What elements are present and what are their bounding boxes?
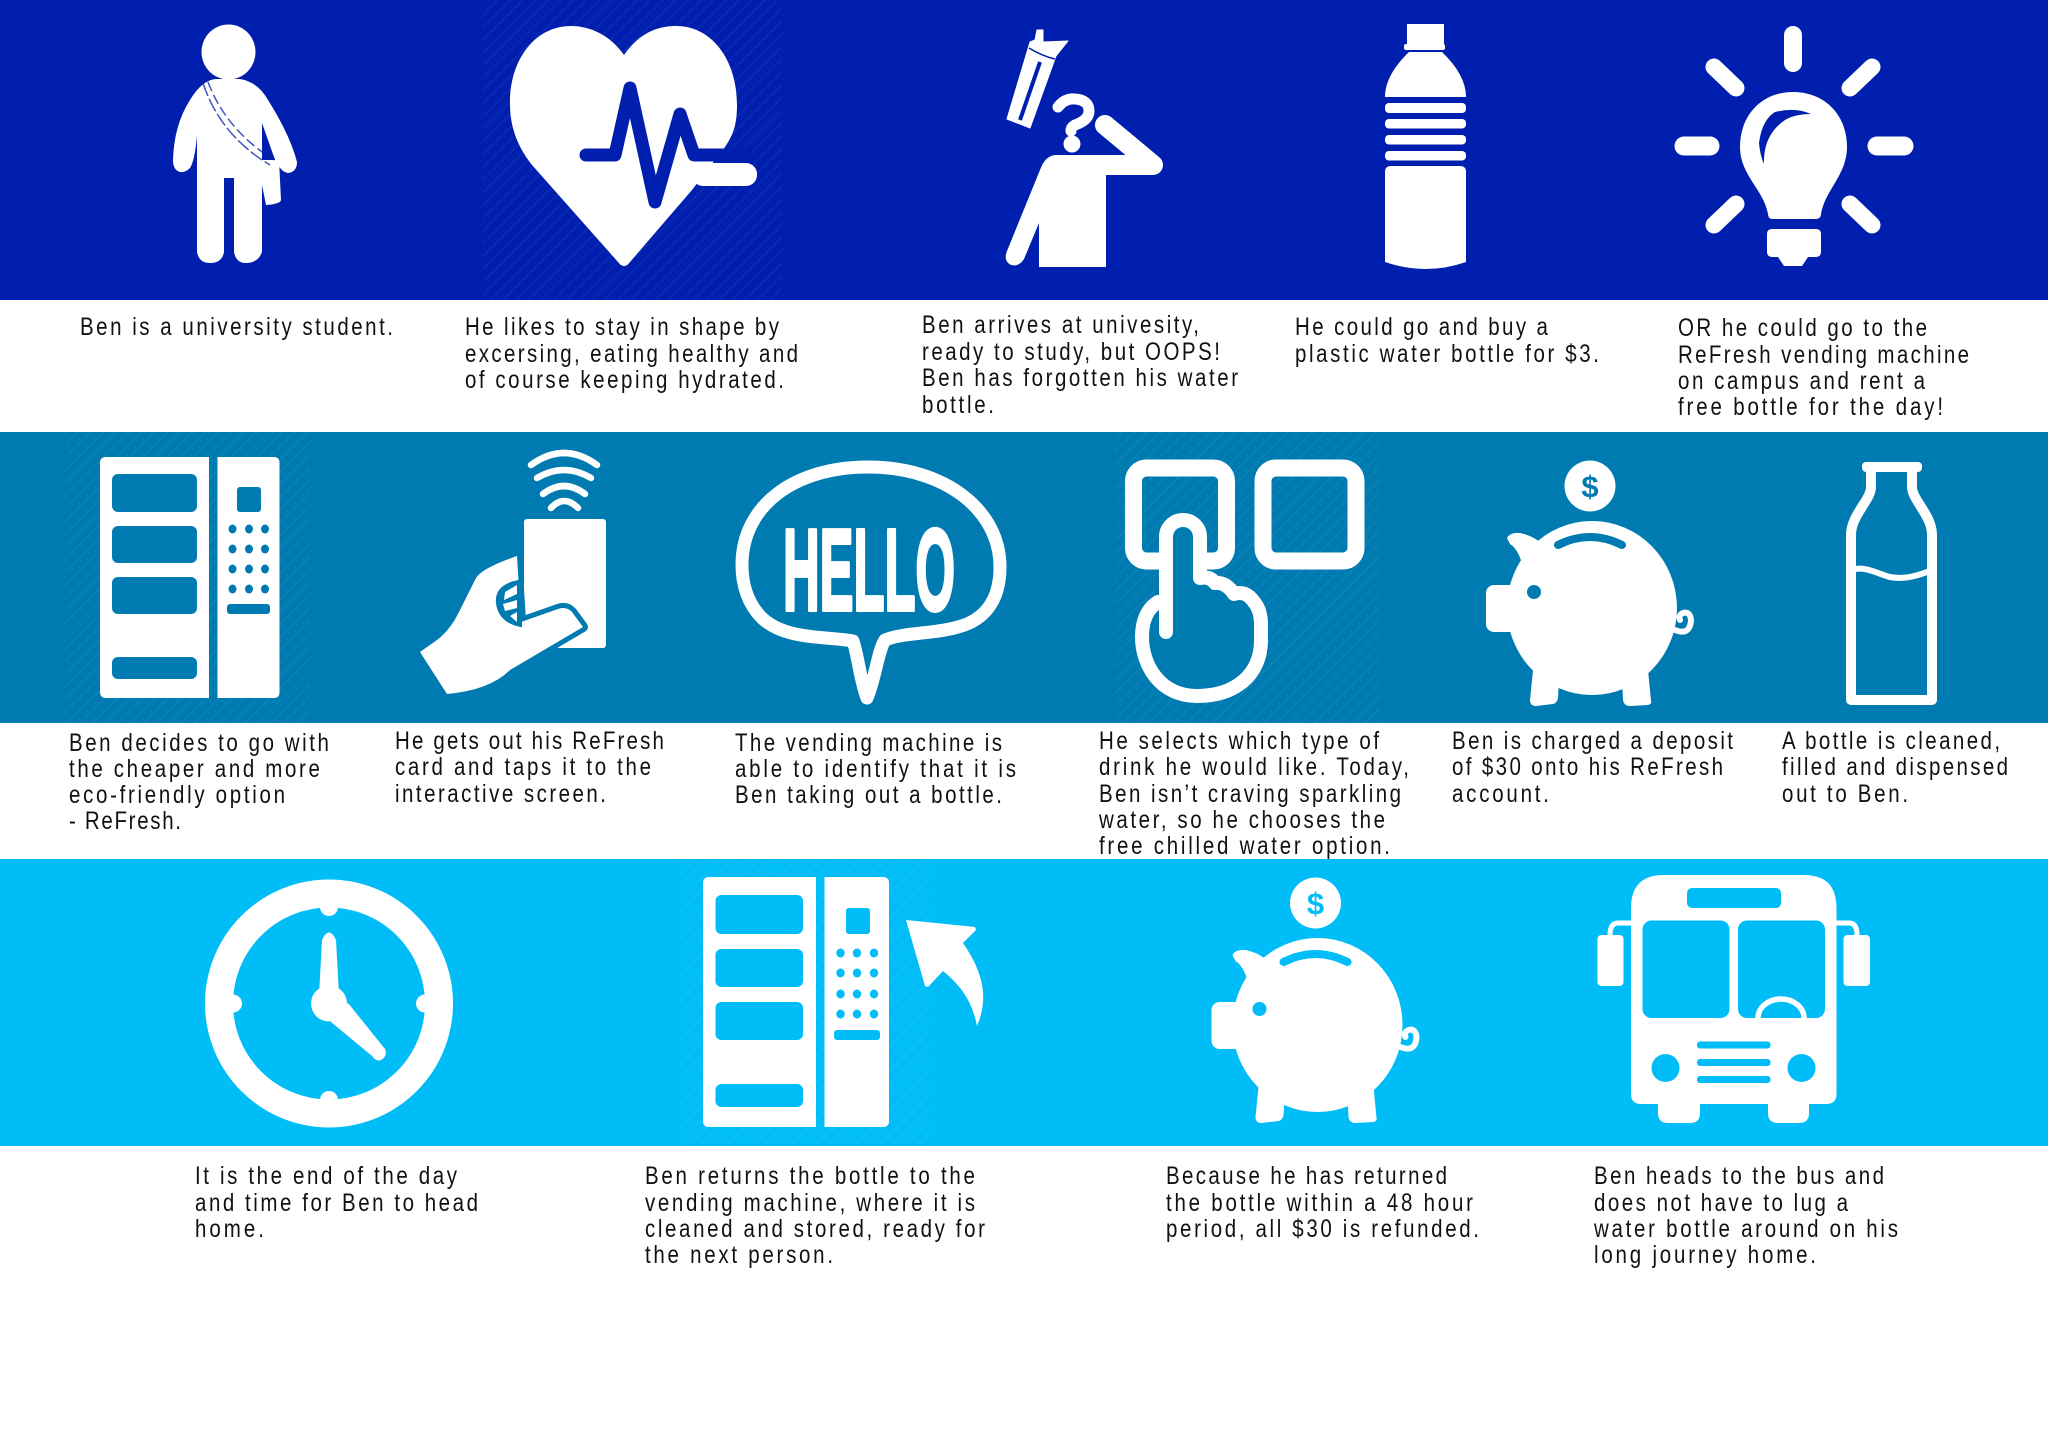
icon: light bulb idea	[1684, 35, 1904, 266]
caption: staying in shape	[465, 312, 798, 393]
icon: piggy bank with coin: $	[1581, 469, 1599, 504]
caption: plastic bottle option: plastic water bottle for $3.	[1295, 339, 1599, 367]
caption: deposit charged: account.	[1452, 779, 1549, 807]
caption: student: Ben is a university student.	[80, 312, 393, 340]
caption: forgot bottle: Ben has forgotten his water	[922, 363, 1238, 391]
caption: plastic bottle option: He could go and buy a	[1295, 312, 1548, 340]
caption: deposit refunded: Because he has returned	[1166, 1161, 1447, 1189]
caption: heads home by bus: water bottle around on his	[1593, 1214, 1898, 1242]
caption: forgot bottle: Ben arrives at univesity,	[922, 310, 1199, 338]
caption: deposit refunded: the bottle within a 48 hour	[1166, 1188, 1473, 1216]
icon: bus	[1598, 875, 1870, 1123]
caption: ReFresh option: on campus and rent a	[1678, 366, 1925, 394]
caption: deposit charged: of $30 onto his ReFresh	[1452, 752, 1723, 780]
caption: chooses ReFresh: the cheaper and more	[69, 754, 320, 782]
caption: returns bottle: vending machine, where it is	[645, 1188, 975, 1216]
caption: chooses ReFresh: Ben decides to go with	[69, 728, 329, 756]
caption: returns bottle: cleaned and stored, ready for	[645, 1214, 985, 1242]
icon: refillable glass bottle half full	[1851, 462, 1932, 700]
caption: end of day: It is the end of the day	[195, 1161, 457, 1189]
caption: machine identifies Ben	[735, 728, 1016, 808]
caption: ReFresh option: free bottle for the day!	[1678, 392, 1943, 420]
caption: selects drink: drink he would like. Today,	[1099, 752, 1409, 780]
icon: speech bubble saying HELLO	[742, 467, 1000, 698]
icon: plastic water bottle	[1385, 24, 1466, 269]
caption: chooses ReFresh: - ReFresh.	[69, 806, 181, 834]
caption: returns bottle: the next person.	[645, 1240, 833, 1268]
icon: clock	[219, 894, 439, 1114]
caption: forgot bottle	[922, 310, 1238, 418]
caption: ReFresh option: OR he could go to the	[1678, 313, 1927, 341]
icon: piggy bank refund	[1212, 878, 1416, 1123]
caption: staying in shape: of course keeping hydrated.	[465, 365, 784, 393]
caption: taps card	[395, 726, 664, 807]
caption: taps card: interactive screen.	[395, 779, 606, 807]
caption: staying in shape: He likes to stay in shape by	[465, 312, 779, 340]
caption: heads home by bus: long journey home.	[1594, 1240, 1816, 1268]
icon: finger selecting a drink button	[1134, 468, 1356, 696]
caption: selects drink	[1098, 726, 1409, 859]
caption: forgot bottle: bottle.	[922, 390, 994, 418]
caption: deposit refunded: period, all $30 is refunded.	[1166, 1214, 1479, 1242]
caption: staying in shape: excersing, eating healthy and	[465, 339, 798, 367]
caption: ReFresh option: ReFresh vending machine	[1678, 340, 1969, 368]
icon: piggy bank with coin	[1486, 460, 1691, 706]
icon: vending machine	[100, 457, 280, 698]
caption: heads home by bus	[1593, 1161, 1898, 1268]
caption: selects drink: free chilled water option.	[1099, 831, 1390, 859]
caption: machine identifies Ben: The vending machine is	[735, 728, 1002, 756]
band: light blue	[0, 859, 2048, 1146]
caption: bottle dispensed: out to Ben.	[1782, 779, 1908, 807]
caption: chooses ReFresh	[69, 728, 329, 834]
caption: plastic bottle option	[1295, 312, 1599, 367]
band: mid blue	[0, 432, 2048, 723]
caption: end of day: and time for Ben to head	[195, 1188, 478, 1216]
caption: bottle dispensed	[1782, 726, 2008, 807]
caption: chooses ReFresh: eco-friendly option	[69, 780, 285, 808]
caption: end of day: home.	[195, 1214, 264, 1242]
caption: selects drink: He selects which type of	[1099, 726, 1380, 754]
caption: end of day	[195, 1161, 478, 1242]
icon: heart with pulse line	[510, 26, 757, 266]
caption: bottle dispensed: A bottle is cleaned,	[1782, 726, 2000, 754]
caption: returns bottle: Ben returns the bottle to the	[645, 1161, 975, 1189]
icon: forgetful man with water bottle and question mark	[1006, 30, 1153, 267]
caption: heads home by bus: does not have to lug a	[1594, 1188, 1848, 1216]
icon: vending machine with return arrow	[703, 877, 983, 1127]
caption: deposit charged	[1452, 726, 1734, 807]
caption: returns bottle	[645, 1161, 985, 1268]
panel: row 2, using the machine	[0, 432, 2048, 859]
caption: bottle dispensed: filled and dispensed	[1782, 752, 2008, 780]
caption: selects drink: water, so he chooses the	[1098, 805, 1385, 833]
caption: taps card: He gets out his ReFresh	[395, 726, 664, 754]
caption: machine identifies Ben: able to identify that it is	[735, 754, 1016, 782]
caption: heads home by bus: Ben heads to the bus and	[1594, 1161, 1884, 1189]
caption: machine identifies Ben: Ben taking out a bottle.	[735, 780, 1002, 808]
icon: piggy bank refund: $	[1307, 886, 1324, 921]
icon: speech bubble saying HELLO: HELLO	[783, 505, 955, 635]
caption: forgot bottle: ready to study, but OOPS!	[922, 337, 1220, 365]
icon: hand tapping card with contactless waves	[420, 453, 606, 694]
band: dark blue	[0, 0, 2048, 300]
panel: row 3, returning the bottle	[0, 859, 2048, 1268]
panel: row 1, Ben's problem	[0, 0, 2048, 420]
caption: deposit charged: Ben is charged a deposit	[1452, 726, 1734, 754]
caption: taps card: card and taps it to the	[395, 752, 651, 780]
caption: deposit refunded	[1166, 1161, 1479, 1242]
caption: ReFresh option	[1678, 313, 1969, 420]
caption: selects drink: Ben isn’t craving sparkling	[1099, 779, 1401, 807]
icon: student with shoulder bag	[173, 24, 297, 263]
